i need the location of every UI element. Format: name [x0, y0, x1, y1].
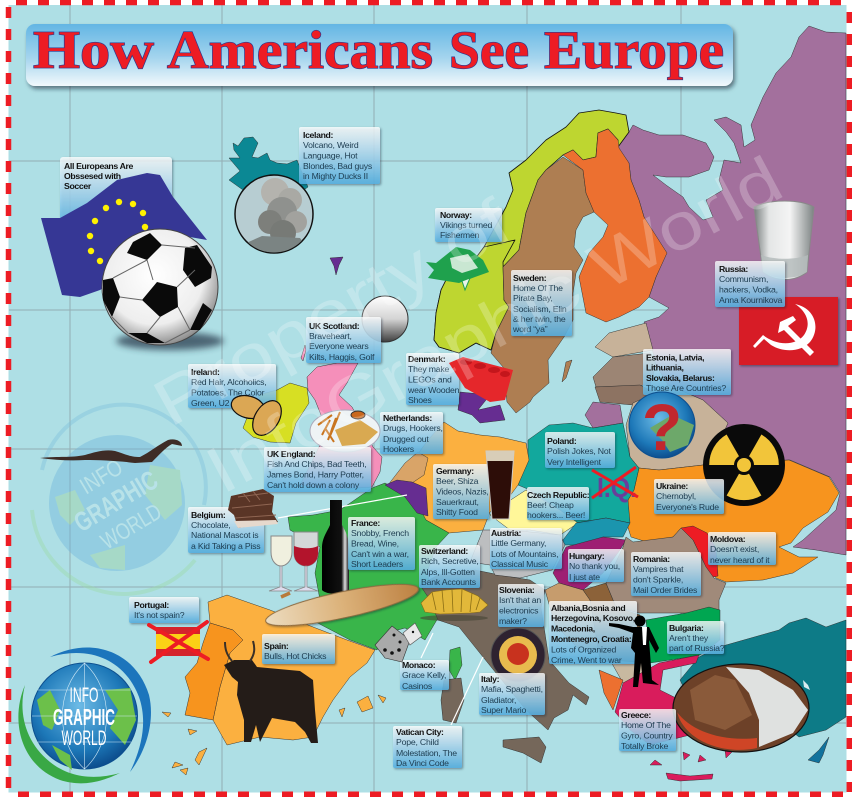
- ball: [102, 229, 218, 345]
- country: Denmark: [458, 392, 505, 423]
- panel: Iceland: Volcano, Weird: [303, 140, 359, 150]
- logo globe: [32, 663, 138, 769]
- logo words: [53, 684, 115, 750]
- chocolate squares: [232, 491, 276, 518]
- hammer and sickle: [753, 304, 815, 356]
- dice pips: [383, 631, 414, 655]
- pasta: [499, 636, 537, 674]
- country: Cyprus: [808, 737, 829, 763]
- title text: How: [33, 20, 154, 80]
- panel: Greece: Home Of The: [621, 720, 671, 730]
- panel: Poland: [545, 432, 615, 468]
- watermark logo text: GRAPHIC: [69, 465, 163, 538]
- icon: soccer ball: [102, 229, 224, 350]
- country: Norway: [434, 110, 629, 353]
- panel: Czech Republic: [527, 487, 590, 520]
- panel: Slovenia: electronics: [499, 606, 539, 616]
- panel: Italy: Super Mario: [481, 705, 526, 715]
- country: Spain: [208, 595, 375, 745]
- tomato: [677, 712, 757, 750]
- white shirt: [642, 627, 647, 645]
- banner panel: [26, 24, 733, 86]
- panel: soccer: Obssesed with: [64, 171, 121, 181]
- ash cloud: [248, 178, 307, 252]
- panel: Ireland: Potatoes, The Color: [191, 388, 265, 398]
- icon: gold bars: [420, 589, 488, 621]
- logo words: INFO: [70, 684, 98, 707]
- icon: loch ness monster: [40, 439, 182, 463]
- panel: Romania: [631, 552, 701, 596]
- country: Hungary: [553, 537, 626, 590]
- country: Estonia: [595, 323, 653, 357]
- icon: fish and chips: [310, 410, 380, 452]
- bars shadow: [420, 615, 488, 621]
- panel: Bulgaria: [667, 621, 725, 654]
- panel: Switzerland: [419, 545, 480, 588]
- country: France: [288, 483, 449, 650]
- panel: Russia: [715, 261, 785, 307]
- panel: UK England: UK England:: [267, 449, 316, 459]
- dip: [351, 411, 365, 419]
- panel: Czech Republic: Czech Republic:: [527, 490, 590, 500]
- panel: Slovenia: [498, 584, 544, 627]
- country: Slovakia: [563, 518, 630, 545]
- panel: Norway: Norway:: [440, 210, 472, 220]
- panel: Monaco: Casinos: [402, 681, 433, 691]
- panel: Bulgaria: Bulgaria:: [669, 623, 704, 633]
- panel: Albania and the Balkans: [549, 601, 637, 665]
- panel: Poland: Poland:: [547, 436, 577, 446]
- icon: white wine glass: [269, 536, 292, 591]
- panel: Germany: Germany:: [436, 466, 474, 476]
- panel: Norway: [435, 208, 502, 242]
- panel: Belgium: [188, 507, 264, 553]
- panel: soccer: Soccer: [64, 181, 92, 191]
- panel: Austria: Little Germany,: [491, 538, 546, 548]
- panel: Norway: Fishermen: [440, 230, 480, 240]
- logo grid: [32, 663, 137, 769]
- panel: UK Scotland: UK Scotland:: [309, 321, 360, 331]
- panel: Ireland: Green, U2: [191, 398, 230, 408]
- country: Sicily: [503, 737, 546, 763]
- panel: Slovenia: maker?: [499, 616, 527, 626]
- red wine: [294, 546, 318, 566]
- country: Belgium: [385, 480, 428, 516]
- country: Portugal: [185, 623, 243, 720]
- panel: Sweden: Sweden:: [513, 273, 547, 283]
- blue swoosh: [50, 647, 151, 772]
- panel: Russia: Communism,: [719, 274, 768, 284]
- country: Romania: [606, 528, 726, 613]
- watermark text: InfoGraphic World: [194, 142, 794, 507]
- country: Bulgaria: [646, 607, 720, 663]
- panel: Switzerland: Alps, Ill-Gotten: [421, 567, 475, 577]
- panel: Greece: Gyro, Country: [621, 730, 673, 740]
- country: Lithuania: [595, 385, 655, 405]
- panel: Russia: Russia:: [719, 264, 748, 274]
- panel: Russia: Anna Kournikova: [719, 295, 783, 305]
- panel: Vatican City: Pope, Child: [396, 737, 439, 747]
- panel: Albania and the Balkans: Lots of Organized: [551, 644, 617, 654]
- stem: [294, 566, 318, 591]
- country: Croatia and Bosnia: [545, 583, 600, 650]
- icon: gyro: [673, 664, 809, 752]
- icon: beer glass: [486, 451, 514, 519]
- panel: Estonia Latvia Lithuania: Those Are Countries?: [646, 383, 726, 393]
- country: Russia: [618, 26, 846, 555]
- map of Europe: [162, 26, 846, 781]
- panel: Ukraine: Chernobyl,: [656, 491, 696, 501]
- panel: Poland: Polish Jokes, Not: [547, 446, 612, 456]
- panel: Sweden: Pirate Bay,: [513, 293, 553, 303]
- panel: Netherlands: Drugs, Hookers,: [383, 423, 443, 433]
- panel: Romania: Mail Order Brides: [633, 585, 698, 595]
- gold bar ridges: [432, 589, 480, 612]
- logo: Info Graphic World: [18, 647, 151, 783]
- icon: potatoes: [229, 392, 287, 440]
- watermark logo text: INFO: [75, 454, 127, 499]
- panel: Sweden: [511, 270, 572, 336]
- panel: France: Short Leaders: [351, 559, 404, 569]
- horns: [225, 641, 254, 661]
- panel: Albania and the Balkans: Macedonia,: [551, 624, 595, 634]
- icon: red wine glass: [294, 532, 318, 591]
- panel: Denmark: wear Wooden: [407, 385, 460, 395]
- icon: gunman: [609, 616, 659, 687]
- panel: Spain: Bulls, Hot Chicks: [264, 651, 327, 661]
- panel: Italy: [479, 673, 545, 715]
- panel: Hungary: Hungary:: [569, 551, 605, 561]
- icon: corkscrew: [281, 593, 290, 597]
- title text: See: [449, 20, 529, 80]
- panel: Iceland: [299, 127, 380, 184]
- panel: Belgium: a Kid Taking a Piss: [191, 541, 261, 551]
- panel: Sweden: & her twin, the: [513, 314, 566, 324]
- panel: Estonia Latvia Lithuania: Lithuania,: [646, 362, 684, 372]
- country: Iceland: [229, 137, 308, 200]
- brick studs: [460, 359, 510, 377]
- icon: chocolate: [228, 489, 278, 528]
- icon: soviet flag: [739, 297, 838, 365]
- icon: bull: [224, 641, 318, 743]
- panel: France: France:: [351, 518, 380, 528]
- islands: Spanish and Portuguese: [162, 695, 386, 775]
- country: Faroe Islands: [330, 257, 343, 275]
- panel: Ukraine: Everyone's Rude: [656, 502, 719, 512]
- panel: Estonia Latvia Lithuania: Estonia, Latvia,: [646, 352, 704, 362]
- panel: Portugal: Portugal:: [134, 600, 169, 610]
- panel: France: [348, 517, 415, 570]
- icon: volcano: [235, 175, 313, 254]
- radiation blades: [709, 435, 779, 500]
- country: Greece: [615, 655, 699, 745]
- country: Macedonia: [610, 660, 650, 685]
- panel: Moldova: Doesn't exist,: [710, 544, 759, 554]
- panel: Ireland: Ireland:: [191, 367, 220, 377]
- panel: Switzerland: Switzerland:: [421, 546, 468, 556]
- panel: UK Scotland: Braveheart,: [309, 331, 352, 341]
- country: Ireland: [243, 383, 309, 443]
- panel: Vatican City: Da Vinci Code: [396, 758, 449, 768]
- faint globe logo watermark: [32, 405, 206, 594]
- icon: baguette: [263, 576, 421, 634]
- panel: France: Snobby, French: [351, 528, 409, 538]
- panel: Germany: Beer, Shiza: [436, 476, 479, 486]
- panel: Denmark: They make: [408, 364, 450, 374]
- watermark logo text: [55, 442, 177, 561]
- panel: Russia: hackers, Vodka,: [719, 284, 778, 294]
- stem: [269, 566, 292, 591]
- panel: Belgium: Belgium:: [191, 510, 226, 520]
- panel: Bulgaria: Aren't they: [669, 633, 709, 643]
- panel: UK Scotland: Kilts, Haggis, Golf: [309, 352, 375, 362]
- country: Czech Republic: [490, 490, 578, 535]
- panel: Denmark: [406, 353, 460, 405]
- panel: Estonia Latvia Lithuania: Slovakia, Belarus:: [646, 373, 715, 383]
- panel: Czech Republic: hookers... Beer!: [527, 510, 585, 520]
- watermark swooshes: [42, 405, 206, 505]
- country: Sardinia: [441, 678, 464, 723]
- panel: France: Can't win a war,: [351, 549, 409, 559]
- panel: Greece: Totally Broke: [621, 741, 668, 751]
- country: Corsica: [449, 647, 462, 680]
- panel: Moldova: [708, 532, 776, 565]
- country: Italy: [420, 570, 589, 730]
- panel: Iceland: in Mighty Ducks II: [303, 171, 368, 181]
- ball shadow: [116, 332, 224, 350]
- flag stars: [87, 199, 148, 264]
- panel: Romania: don't Sparkle,: [633, 574, 683, 584]
- question mark: ?: [642, 390, 682, 464]
- panel: Spain: [262, 634, 335, 664]
- panel: Slovenia: Isn't that an: [499, 595, 541, 605]
- panel: Vatican City: [393, 726, 462, 768]
- panel: Vatican City: Vatican City:: [396, 727, 444, 737]
- paper wrap: [726, 667, 808, 747]
- panel: soccer: All Europeans Are: [64, 161, 134, 171]
- watermark text: Property of: [141, 184, 523, 440]
- country: Sweden: [491, 157, 594, 413]
- panel: Norway: Vikings turned: [440, 220, 492, 230]
- panel: Ukraine: [654, 479, 724, 514]
- panel: Monaco: Monaco:: [402, 660, 436, 670]
- panel: Poland: Very Intelligent: [547, 457, 602, 467]
- fish belly: [450, 254, 478, 273]
- icon: crossed out IQ: I.Q.: [597, 472, 637, 503]
- globe land: [650, 415, 694, 452]
- panel: Netherlands: Netherlands:: [383, 413, 432, 423]
- panel: Hungary: [568, 549, 624, 582]
- beer head: [486, 451, 514, 461]
- panel: Germany: Videos, Nazis,: [436, 486, 489, 496]
- panel: Hungary: No thank you,: [569, 561, 620, 571]
- watermark logo text: WORLD: [96, 498, 166, 554]
- country: Belarus: [626, 385, 728, 470]
- panel: Greece: Greece:: [621, 710, 651, 720]
- panel: Denmark: Denmark:: [408, 354, 446, 364]
- panel: Albania and the Balkans: Crime, Went to war: [551, 655, 622, 665]
- country: Latvia: [593, 353, 656, 387]
- ball seams: [112, 245, 195, 343]
- country: United Kingdom: [300, 363, 382, 490]
- panel: Netherlands: Hookers: [383, 444, 415, 454]
- icon: radiation: [703, 424, 785, 506]
- pointer lines: [278, 495, 483, 725]
- panel: UK Scotland: [306, 317, 381, 363]
- icon: golf ball: [362, 296, 408, 342]
- country: Kaliningrad: [585, 402, 623, 428]
- panel: Belgium: Chocolate,: [191, 520, 231, 530]
- icon: lego brick: [449, 357, 513, 402]
- panel: Monaco: [400, 660, 449, 691]
- icon: EU flag: [41, 173, 207, 297]
- panel: Portugal: It's not spain?: [134, 610, 185, 620]
- panel: Denmark: LEGOs and: [408, 374, 452, 384]
- panel: Slovenia: Slovenia:: [499, 585, 535, 595]
- icon: question globe: [629, 390, 695, 464]
- watermark text: [141, 142, 794, 507]
- panel: Iceland: Iceland:: [303, 130, 333, 140]
- panel: Sweden: word “ya”: [512, 324, 548, 334]
- lake in Turkey: [803, 680, 810, 690]
- panel: Germany: Shitty Food: [436, 507, 478, 517]
- icon: spaghetti: [491, 628, 545, 682]
- icon: crossed out Spanish flag: [149, 622, 208, 662]
- panel: Belgium: National Mascot is: [191, 530, 259, 540]
- panel: Albania and the Balkans: Herzegovina, Kosovo,: [551, 613, 635, 623]
- panel: UK England: Can't hold down a colony: [267, 480, 360, 490]
- panel: Romania: Romania:: [633, 554, 670, 564]
- green swoosh: [18, 685, 120, 783]
- panel: UK England: Fish And Chips, Bad Teeth,: [267, 459, 366, 469]
- logo continents: [37, 688, 136, 770]
- panel: Germany: Sauerkraut,: [436, 497, 479, 507]
- panel: Switzerland: Rich, Secretive,: [421, 556, 479, 566]
- country: Turkey: [680, 618, 846, 745]
- sauce: [507, 643, 529, 665]
- logo words: WORLD: [62, 727, 106, 750]
- panel: Albania and the Balkans: Montenegro, Croatia:: [551, 634, 632, 644]
- panel: Romania: Vampires that: [633, 564, 684, 574]
- panel: Moldova: Moldova:: [710, 534, 746, 544]
- yellow stripe: [156, 634, 200, 649]
- islands: Outer Hebrides: [301, 345, 306, 361]
- fish fillet: [335, 420, 378, 446]
- panel: Netherlands: [380, 412, 443, 454]
- panel: Iceland: Blondes, Bad guys: [303, 161, 373, 171]
- glass base: [761, 255, 808, 278]
- panel: Sweden: Home Of The: [513, 283, 563, 293]
- panel: Italy: Mafia, Spaghetti,: [481, 684, 543, 694]
- icon: fish: [426, 247, 489, 290]
- country: Germany: [405, 422, 529, 533]
- red cross: [592, 467, 638, 498]
- panel: Iceland: Language, Hot: [303, 150, 358, 160]
- country: southern Norway: [434, 240, 515, 353]
- panel: Austria: [490, 528, 562, 569]
- panel: Austria: Austria:: [491, 528, 521, 538]
- panel: Italy: Italy:: [481, 674, 500, 684]
- country: Netherlands: [388, 452, 428, 485]
- panel: Hungary: I just ate: [569, 572, 600, 582]
- panel: Denmark: Shoes: [408, 395, 432, 405]
- panel: Czech Republic: Beer! Cheap: [527, 500, 574, 510]
- panel: UK England: [264, 447, 371, 492]
- country: Serbia: [583, 583, 640, 670]
- title text: Europe: [544, 20, 724, 80]
- panel: Moldova: never heard of it: [710, 555, 770, 565]
- wrapper: [234, 520, 278, 528]
- panel: soccer: [60, 157, 172, 227]
- panel: Portugal: [129, 597, 199, 623]
- panel: Austria: Classical Music: [491, 559, 549, 569]
- panel: Switzerland: Bank Accounts: [421, 577, 477, 587]
- logo words: GRAPHIC: [53, 704, 115, 730]
- country: Austria: [470, 530, 565, 578]
- title banner: [26, 20, 733, 86]
- country: Poland: [518, 423, 639, 523]
- country: Gotland: [562, 360, 572, 382]
- country: Crete and Aegean islands: [650, 750, 732, 781]
- red cross: [149, 622, 208, 662]
- panel: Bulgaria: part of Russia?: [669, 643, 725, 653]
- panel: Vatican City: Molestation, The: [396, 748, 457, 758]
- panel: Estonia Latvia Lithuania: [643, 349, 731, 395]
- panel: Sweden: Socialism, Elin: [513, 304, 567, 314]
- icon: dice: [375, 623, 422, 662]
- country: Finland: [563, 129, 667, 322]
- icon: vodka glass: [754, 201, 814, 280]
- watermark globe: [49, 435, 185, 571]
- panel: Monaco: Grace Kelly,: [402, 670, 446, 680]
- panel: UK Scotland: Everyone wears: [309, 341, 369, 351]
- title text: Americans: [167, 20, 433, 80]
- ball patches: [103, 233, 212, 343]
- panel: Austria: Lots of Mountains,: [491, 549, 558, 559]
- panel: Albania and the Balkans: Albania,Bosnia and: [551, 603, 625, 613]
- icon: wine bottle: [322, 500, 349, 594]
- country: Ukraine: [624, 460, 839, 582]
- panel: Ireland: Red Hair, Alcoholics,: [191, 377, 266, 387]
- panel: France: Bread, Wine,: [351, 538, 399, 548]
- panel: Greece: [619, 709, 676, 751]
- panel: Ireland: [188, 364, 276, 408]
- panel: UK England: James Bond, Harry Potter,: [267, 470, 364, 480]
- fish fin: [462, 278, 470, 290]
- country: Moldova: [681, 526, 718, 578]
- panel: Germany: [433, 464, 489, 519]
- cream and meat: [690, 675, 752, 730]
- panel: Spain: Spain:: [264, 641, 289, 651]
- panel: Ukraine: Ukraine:: [656, 481, 688, 491]
- country: Albania: [599, 670, 623, 710]
- panel: Netherlands: Drugged out: [383, 434, 429, 444]
- watermark continents: [55, 465, 182, 570]
- panel: Italy: Gladiator,: [481, 695, 516, 705]
- title text: [33, 20, 724, 80]
- chips: [318, 412, 340, 442]
